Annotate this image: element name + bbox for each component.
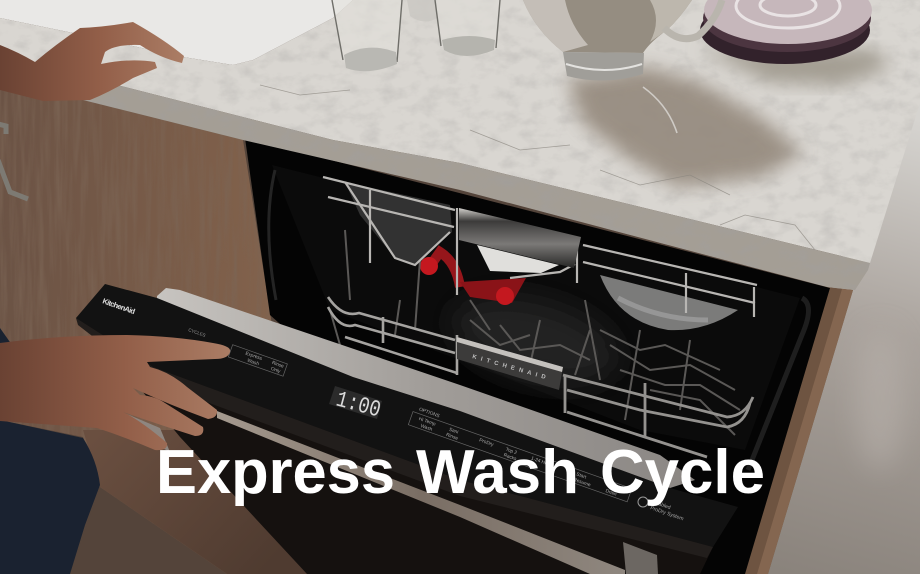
upper rack rails (323, 177, 757, 317)
left hand on counter (0, 22, 184, 101)
stacked plates (700, 0, 872, 64)
floor: bottom left (70, 487, 227, 574)
door handle under hand (122, 412, 170, 452)
lower rack left wires (328, 297, 457, 375)
title: Wash (416, 438, 579, 507)
glass in upper rack (345, 182, 452, 265)
option buttons: Wash (420, 423, 433, 433)
title (156, 438, 765, 507)
marble veins (260, 85, 815, 250)
option buttons: ProDry (478, 437, 495, 448)
option buttons (408, 405, 634, 502)
door front (76, 318, 713, 574)
hand on door (0, 335, 230, 450)
plate shadow on counter (700, 50, 890, 85)
timer display: 1:00 (333, 387, 383, 423)
cabinet: right wood panel (738, 287, 853, 574)
drinking glasses (332, 0, 500, 71)
lower rack handle with logo plate: KITCHENAID (471, 354, 547, 381)
counter top surface (0, 0, 920, 263)
countertop (0, 0, 920, 290)
dishwasher door (76, 284, 738, 574)
option buttons: Top 2 (505, 447, 518, 456)
lower rack handle with logo plate (457, 337, 563, 390)
option buttons: Start (575, 472, 588, 481)
option buttons: Rinse (445, 432, 459, 442)
cycle buttons (228, 345, 287, 376)
bowl shadow on counter (567, 67, 803, 187)
ProDry system badge: ProDry System (649, 505, 684, 522)
ProDry system badge (638, 497, 684, 522)
lower rack dark wires (330, 230, 740, 435)
upper rack handle (459, 208, 581, 268)
cycle label: CYCLES (188, 327, 206, 338)
title: Cycle (600, 438, 765, 507)
dishwasher interior (245, 138, 830, 574)
jeans (0, 328, 100, 574)
door handle bar (217, 411, 625, 574)
option buttons: Drain (605, 488, 618, 498)
red spray arm (420, 252, 526, 305)
option buttons: Resume (572, 477, 592, 489)
cycle buttons: Wash (246, 358, 260, 367)
option buttons: Sani (448, 427, 459, 436)
brand label: KitchenAid (101, 296, 137, 316)
mixing bowl with pitcher handle (523, 0, 722, 81)
option buttons: OPTIONS (418, 407, 440, 419)
cabinet: left wood panel (0, 85, 322, 574)
sink (0, 0, 353, 65)
control panel (76, 284, 738, 547)
counter front edge (83, 85, 870, 290)
lower rack right wires (563, 375, 753, 457)
title: Express (156, 438, 395, 507)
option buttons: 1-24 Hr (530, 456, 548, 467)
cycle buttons: Express (244, 351, 263, 362)
option buttons: Hi Temp (418, 416, 437, 428)
reflection on counter (643, 87, 677, 133)
floor: right side (738, 100, 920, 574)
cycle buttons: Only (270, 366, 282, 375)
stainless top edge (157, 288, 695, 488)
cabinet handle (0, 124, 28, 199)
cycle buttons: Rinse (271, 360, 285, 370)
white bowl (477, 245, 559, 273)
gray plate in upper rack (600, 275, 738, 330)
option buttons: Racks (503, 452, 518, 463)
ProDry system badge: Enabled (651, 499, 671, 511)
